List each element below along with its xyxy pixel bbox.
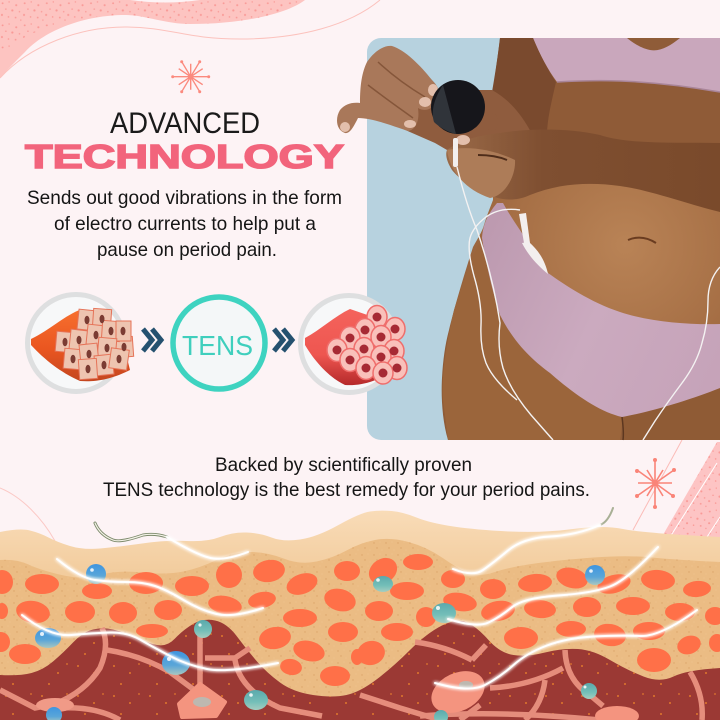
thigh shading (443, 238, 622, 440)
fingernails (340, 84, 470, 145)
text block: description (27, 187, 342, 261)
white electrical pulse waves (22, 525, 697, 689)
torso and thighs (442, 38, 720, 440)
nerve cell bodies (36, 663, 639, 720)
electrode pad (431, 80, 485, 134)
text block: closing statement (103, 455, 590, 501)
decoration: top-left pink blob (0, 0, 380, 78)
forearm (446, 129, 720, 212)
arrow: first double chevron (143, 329, 161, 351)
icon: lower starburst (635, 458, 676, 509)
decoration: left pink curve (0, 488, 55, 541)
arrow: second double chevron (274, 329, 292, 351)
fingertip (486, 113, 498, 131)
text block: description: of electro currents to help put a (54, 213, 316, 235)
bra (533, 38, 720, 92)
icon: top starburst (171, 60, 210, 93)
text block: description: pause on period pain. (97, 239, 277, 261)
heading: ADVANCED: ADVANCED (110, 107, 260, 140)
upper chest (547, 81, 720, 150)
belly button (628, 238, 656, 243)
icon: TENS circle: TENS (182, 330, 253, 361)
lead connectors (453, 138, 548, 274)
panel: photo of TENS pad on abdomen (337, 38, 720, 440)
upper hand (337, 46, 440, 133)
wires (457, 167, 720, 440)
droplets (35, 564, 605, 720)
epidermis layer (0, 511, 720, 720)
text block: closing statement: Backed by scientifically proven (215, 455, 472, 476)
illustration: skin cross-section (0, 508, 720, 720)
arm behind disc (403, 90, 532, 150)
dermis sandy layer (0, 539, 720, 720)
blood vessels (0, 625, 702, 720)
underwear (482, 203, 720, 417)
icon: TENS circle (173, 297, 265, 389)
text block: description: Sends out good vibrations in the form (27, 187, 342, 209)
text block: closing statement: TENS technology is the best remedy for your period pains. (103, 480, 590, 501)
hair strands (95, 508, 613, 541)
decoration: right pink blob (633, 440, 720, 540)
upper arm (492, 38, 556, 132)
photo backdrop (367, 38, 720, 440)
icon: tense muscle (28, 294, 134, 392)
fat cells (0, 553, 720, 686)
muscle layer (0, 620, 720, 720)
palm (447, 148, 515, 198)
heading: TECHNOLOGY: TECHNOLOGY (25, 139, 344, 176)
icon: relaxed muscle (300, 296, 407, 392)
